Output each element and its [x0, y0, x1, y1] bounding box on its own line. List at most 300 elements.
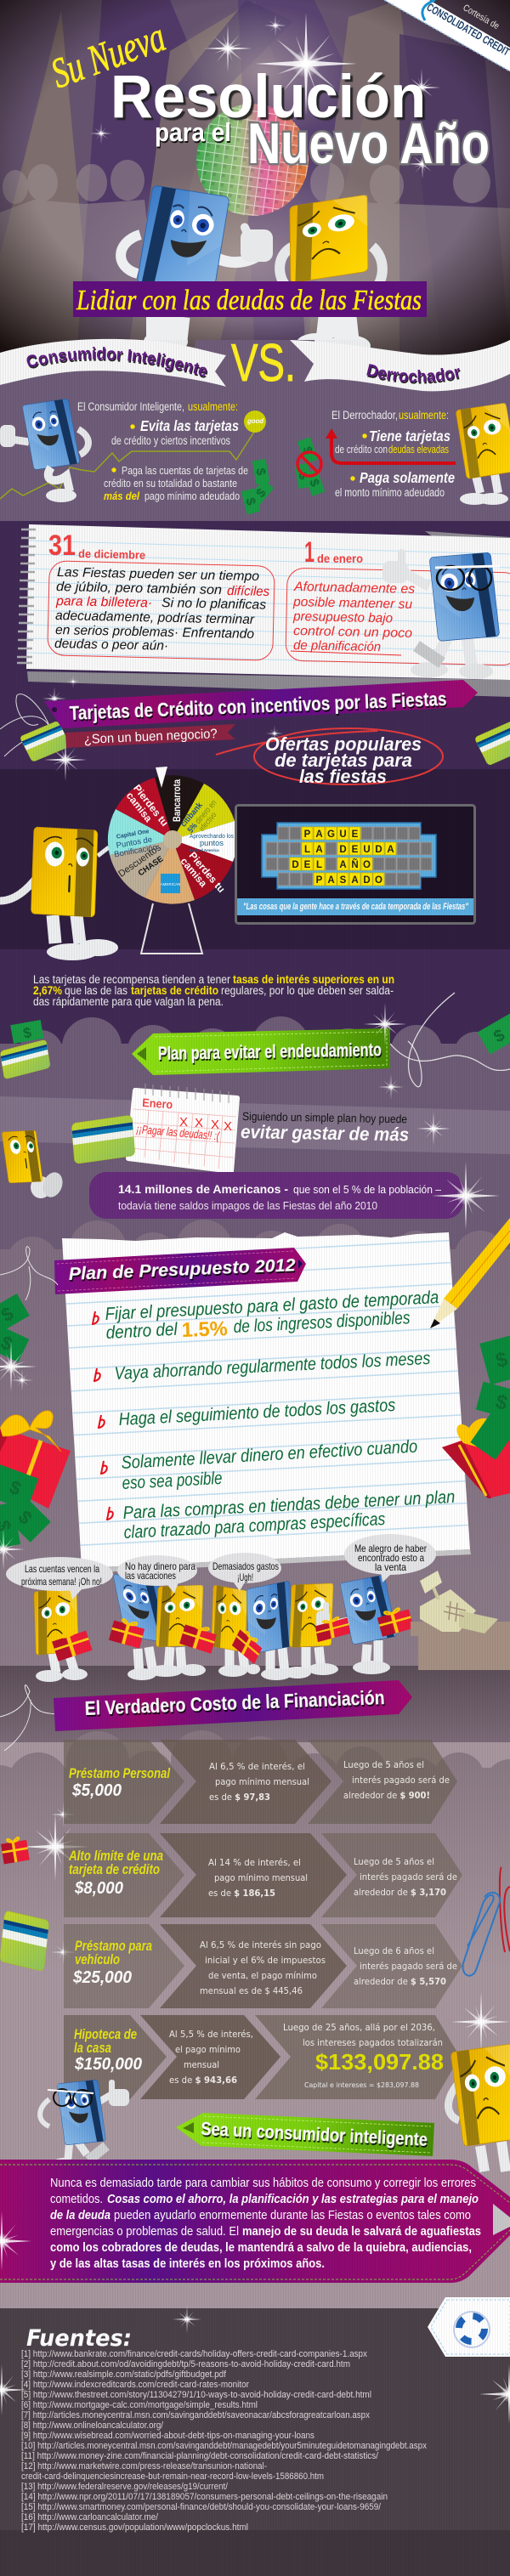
board text: A: [327, 875, 335, 886]
board text: E: [352, 829, 359, 840]
text: simple plan: [241, 1110, 409, 1145]
text: rewards cards interest: que las de las: [65, 984, 128, 997]
row: mortgage: Luego de 25 años, allá por el 2036,: [283, 2022, 435, 2033]
closing text: manejo de su deuda le salvará de aguafiestas: [242, 2225, 481, 2239]
label: Pierdes tu camisa lower: Pierdes tu: [187, 850, 228, 895]
callout: popular offers: [216, 724, 443, 787]
source list: [6] http://www.mortgage-calc.com/mortgage/simple_results.html: [21, 2400, 258, 2410]
icon: money bills right of smart consumer: [241, 459, 275, 515]
bubble: too many expenses: Demasiados gastos: [212, 1560, 279, 1572]
icon: paper clips: [463, 1867, 510, 1976]
chart: rising green line to good credit balloon: [0, 410, 266, 499]
label: Capital One: Bonificación: [113, 843, 158, 859]
label: Descuentos Chase: CHASE: [137, 854, 165, 878]
source list: [9] http://www.wisebread.com/worried-about-debt-tips-on-managing-your-loans: [21, 2431, 314, 2441]
text: spender habits: deudas elevadas: [388, 444, 449, 456]
board cells: [266, 827, 432, 886]
board letter tiles: [290, 827, 396, 886]
sparkles: header: [89, 10, 441, 180]
text: smart consumer habits: de crédito y ciertos incentivos: [111, 434, 230, 447]
floor: dark floor under characters: [0, 1666, 510, 1742]
bubble: glad found sale: la venta: [375, 1561, 406, 1573]
row: vehicle loan: interés pagado será de: [360, 1961, 457, 1972]
board text: A: [387, 845, 394, 855]
decoration: money right: $: [493, 1348, 510, 1373]
row: mortgage: mensual: [184, 2059, 219, 2070]
panel: game show board: [236, 806, 474, 923]
panel: versus comparison: [0, 334, 510, 393]
text: fortunately: control con un poco: [293, 624, 413, 641]
decoration: left side of cost table: [0, 1801, 91, 1971]
title: para el: para el: [155, 117, 231, 147]
list text: Haga el seguimiento de todos los gastos: [118, 1396, 396, 1430]
panel: closing message: [0, 2160, 510, 2283]
row: credit card limit: interés pagado será de: [360, 1871, 457, 1882]
icon: calendar: X: [195, 1116, 203, 1130]
label: American Express square: AMERICAN: [161, 882, 180, 886]
row: credit card limit: Al 14 % de interés, el: [208, 1857, 301, 1868]
text: fortunately: presupuesto bajo: [292, 609, 394, 626]
clouds: second scalloped layer: [0, 1220, 510, 1288]
heading: Derrochador: [366, 375, 462, 382]
logo ribbon: Consolidated Credit: [384, 0, 510, 71]
row: vehicle loan: $25,000: [72, 1968, 132, 1987]
board text: A: [315, 845, 323, 855]
list text: Fijar el presupuesto para el gasto de temporada: [105, 1288, 439, 1324]
bubble: bills due: [6, 1557, 113, 1599]
board text: P: [304, 829, 311, 840]
text: holidays warning: Si no lo planificas: [162, 596, 266, 613]
row: vehicle loan: vehículo: [75, 1951, 120, 1967]
bubble: no vacation money: [117, 1555, 197, 1594]
sparkle: right of cost table: [450, 1990, 510, 2053]
callout: 14.1 millones: todavía tiene saldos impagos de las Fiestas del año 2010: [118, 1200, 377, 1212]
source list: [13] http://www.federalreserve.gov/releases/g19/current/: [21, 2482, 229, 2492]
row: mortgage: $150,000: [74, 2055, 142, 2074]
closing text: de la deuda: [50, 2209, 110, 2222]
badge: life preserver: [428, 2297, 510, 2357]
source list: credit-card-delinquenciesincrease-but-remain-near-record-low-levels-1586860.htm: [21, 2471, 324, 2482]
date: 31 de diciembre: de diciembre: [78, 547, 146, 562]
counter and cash register: [411, 1571, 510, 1670]
decoration: card and money top-left of plan section: $: [22, 1024, 33, 1042]
text: spender habits: de crédito con: [335, 444, 388, 456]
text: holidays warning: Las Fiestas pueden ser un tiempo: [57, 565, 260, 584]
callout: 14.1 millones: [89, 1172, 463, 1219]
text: rewards cards interest: tarjetas de crédito: [131, 984, 218, 997]
source list: [16] http://www.carloancalculator.me/: [21, 2512, 159, 2522]
board text: U: [339, 829, 347, 840]
source list: [15] http://www.smartmoney.com/personal-finance/debt/should-you-consolidate-your-loans-9659/: [21, 2502, 382, 2512]
label: Aprovechando los puntos: [189, 832, 234, 852]
text: smart consumer habits: usualmente:: [188, 400, 238, 413]
list text: Solamente llevar dinero en efectivo cuando: [121, 1437, 418, 1473]
text: holidays warning: para la billetera·: [55, 594, 152, 610]
text: smart consumer habits: Evita las tarjetas: [140, 417, 239, 434]
wheel pointer: [156, 767, 167, 788]
row: mortgage: Hipoteca de: [74, 2026, 137, 2042]
title: Su Nueva: Su Nueva: [45, 13, 171, 97]
heading banner: Plan de Presupuesto 2012: [54, 1248, 306, 1294]
source list: [2] http://credit.about.com/od/avoidingdebt/tp/5-reasons-to-avoid-holiday-credit-card.htm: [21, 2359, 350, 2369]
rope and card left: [0, 694, 71, 762]
heading banner: Sea un consumidor inteligente: [176, 2113, 434, 2156]
legs and feet: [53, 1640, 378, 1674]
text: fortunately: [291, 580, 415, 655]
row: personal loan: $5,000: [71, 1781, 122, 1800]
list text: Vaya ahorrando regularmente todos los meses: [114, 1349, 431, 1384]
character: sitting yellow card: [2, 1130, 65, 1200]
text: smart consumer habits: más del: [104, 490, 139, 502]
callout: 14.1 millones: 14.1 millones de Americanos -: [118, 1183, 288, 1196]
text: smart consumer habits: Paga las cuentas de tarjetas de: [122, 464, 248, 477]
character: yellow 4: [290, 1583, 333, 1647]
text: smart consumer habits: [77, 400, 248, 502]
bubble: glad found sale: [344, 1534, 436, 1582]
ribbon: right white: [290, 340, 510, 391]
icon: money bills right of smart consumer: $: [252, 467, 269, 477]
spotlight beams: [0, 0, 510, 357]
banner: Lidiar con las deudas de las Fiestas: Lidiar con las deudas de las Fiestas: [76, 285, 422, 316]
source list: [4] http://www.indexcreditcards.com/credit-card-rates-monitor: [21, 2380, 249, 2390]
board text: S: [340, 875, 347, 886]
date: 1 de enero: [304, 536, 363, 569]
heading banner: El Verdadero Costo de la Financiación: [54, 1680, 412, 1731]
panel: versus comparison: Derrochador: [366, 364, 461, 384]
panel: torn notepaper budget: [51, 1232, 476, 1573]
closing text: emergencias o problemas de salud. El: [50, 2225, 239, 2239]
icon: calendar: X: [179, 1115, 188, 1129]
icon: calendar: X: [211, 1118, 219, 1132]
date: 31 de diciembre: [48, 529, 146, 562]
text: fortunately: de planificación: [293, 638, 381, 654]
list bullets: [92, 1311, 113, 1520]
row: mortgage: [64, 2015, 460, 2099]
decoration: card and money top-left of plan section: [0, 1020, 50, 1079]
icon: pencil: [430, 1218, 510, 1328]
source list: [12] http://www.marketwire.com/press-release/transunion-national-: [21, 2461, 267, 2471]
list text: 1.5%: [181, 1317, 228, 1342]
source list: [14] http://www.npr.org/2011/07/17/138189057/consumers-personal-debt-ceilings-on-the-riseagain: [21, 2492, 388, 2502]
row: vehicle loan: inicial y el 6% de impuestos: [205, 1955, 326, 1966]
board text: E: [304, 860, 311, 870]
board text: U: [363, 845, 371, 855]
text: holidays warning: de júbilo, pero también son: [56, 580, 222, 597]
row: personal loan: interés pagado será de: [352, 1775, 450, 1786]
bubble: bills due: Las cuentas vencen la: [25, 1563, 99, 1575]
board text: O: [363, 860, 371, 870]
clouds: first scalloped layer: [0, 1016, 510, 1265]
source list: [10] http://articles.moneycentral.msn.com/savinganddebt/managedebt/your5minuteguidetomanagingdebt.aspx: [21, 2441, 427, 2451]
central glow: [170, 4, 357, 140]
notebook spiral: [17, 529, 36, 663]
callout: popular offers: Ofertas populares: [265, 733, 422, 755]
label: Descuentos Chase: Descuentos: [116, 842, 163, 880]
icon: calendar: [128, 1084, 237, 1171]
board text: E: [352, 845, 359, 855]
table: true cost of financing: [64, 1740, 462, 2099]
bubble: no vacation money: No hay dinero para: [125, 1560, 196, 1572]
panel: versus comparison: Consumidor Inteligente: [27, 347, 207, 378]
character: spender yellow card: [456, 403, 510, 505]
row: personal loan: Luego de 5 años el: [343, 1759, 424, 1770]
list text: dentro del: [105, 1320, 178, 1343]
text: spender habits: usualmente:: [399, 409, 449, 422]
clouds: third scalloped layer: [0, 1730, 510, 2312]
rope: cost banner: [0, 1685, 66, 1751]
closing text: Cosas como el ahorro, la planificación y las estrategias para el manejo: [107, 2193, 479, 2206]
character: hero yellow card: [280, 195, 382, 357]
bubble: too many expenses: ¡Ugh!: [237, 1571, 253, 1583]
board text: [292, 829, 394, 886]
date: 1 de enero: 1: [304, 536, 314, 569]
callout: 14.1 millones: que son el 5 % de la población –: [293, 1184, 441, 1196]
bubble: no vacation money: las vacaciones: [125, 1570, 176, 1582]
row: personal loan: [64, 1740, 457, 1824]
board text: D: [339, 845, 347, 855]
closing text: como los cobradores de deudas, le mantendrá a salvo de la quiebra, audiencias,: [50, 2241, 472, 2255]
label: Pierdes tu camisa upper: Pierdes tu: [131, 783, 171, 829]
text: holidays warning: deudas o peor aún·: [54, 637, 168, 654]
list text: claro trazado para compras específicas: [123, 1509, 386, 1543]
footer: sources panel: [0, 2297, 510, 2576]
icon: credit card by calendar: [71, 1115, 135, 1164]
small gifts: [51, 1627, 93, 1662]
bubble: bills due: próxima semana! ¡Oh no!: [21, 1576, 102, 1588]
speech bubbles: [6, 1534, 436, 1599]
row: credit card limit: Alto límite de una: [68, 1848, 163, 1864]
label: American Express square: [161, 874, 180, 893]
label: Capital One: Puntos de: [116, 835, 153, 851]
icon: prohibited money: $: [306, 477, 322, 490]
character: yellow 2: [156, 1585, 203, 1647]
text: simple plan: Siguiendo un simple plan hoy puede: [242, 1110, 407, 1125]
bubble: too many expenses: [208, 1553, 281, 1591]
board text: D: [292, 860, 299, 870]
icon: gift right: [442, 1406, 510, 1498]
sub-banner: ¿Son un buen negocio?: ¿Son un buen negocio?: [83, 727, 218, 747]
icon: prohibited money: [294, 437, 325, 496]
icon: prohibited money: $: [299, 444, 315, 457]
vignette: [0, 0, 510, 357]
text: spender habits: [332, 409, 455, 499]
rope: budget banner: [0, 1247, 58, 1300]
date: 31 de diciembre: 31: [48, 529, 76, 562]
row: personal loan: alrededor de $ 900!: [343, 1790, 430, 1801]
heading banner: Plan para evitar el endeudamiento: [132, 1028, 390, 1075]
sparkles: left of notepaper: [0, 1339, 38, 1394]
text: spender habits: Tiene tarjetas: [369, 427, 450, 444]
board text: A: [351, 875, 359, 886]
icon: disco ball: [196, 102, 310, 217]
heading: Fuentes: Fuentes:: [26, 2325, 132, 2352]
text: holidays warning: adecuadamente, podrías terminar: [55, 609, 255, 627]
crowd silhouettes: [0, 160, 510, 357]
card icon right: [474, 721, 510, 766]
row: vehicle loan: de venta, el pago mínimo: [208, 1970, 317, 1981]
text: fortunately: Afortunadamente es: [293, 580, 415, 597]
source list: [7] http://articles.moneycentral.msn.com/savinganddebt/saveonacar/abcsforagreatcarloan.aspx: [21, 2410, 370, 2420]
closing text: pueden ayudarlo enormemente durante las Fiestas o eventos tales como: [114, 2209, 471, 2222]
text: rewards cards interest: regulares, por lo que deben ser salda-: [221, 984, 394, 997]
heading banner: El Verdadero Costo de la Financiación: El Verdadero Costo de la Financiación: [84, 1686, 385, 1719]
callout outline: right: [286, 568, 510, 665]
row: mortgage: $133,097.88: [315, 2049, 444, 2075]
row: credit card limit: pago mínimo mensual: [214, 1872, 308, 1883]
character: yellow 3: [212, 1585, 247, 1652]
icon: gift left: [0, 1411, 71, 1509]
rope: right of plan banner: [390, 993, 510, 1087]
decoration: money right: [476, 1333, 510, 1462]
character: blue 1: [113, 1574, 170, 1644]
text: rewards cards interest: 2,67%: [33, 984, 62, 997]
label: Capital One: Capital One: [116, 829, 150, 841]
decoration: money top-right of plan section: [478, 1014, 510, 1055]
ribbon: left white: [0, 339, 226, 387]
character: hero blue card: [121, 185, 273, 354]
icon: prohibited money: $: [295, 472, 311, 481]
text: rewards cards interest: Las tarjetas de recompensa tienden a tener: [33, 973, 230, 986]
label: Pierdes tu camisa upper: camisa: [124, 790, 155, 824]
source list: [17] http://www.census.gov/population/www/popclockus.html: [21, 2522, 248, 2533]
icon: calendar: X: [224, 1119, 232, 1134]
title block: [45, 13, 490, 176]
text: spender habits: El Derrochador,: [332, 409, 398, 422]
decoration: money under gift left: $: [14, 1506, 37, 1529]
courtesy label: Cortesía de: [461, 3, 501, 31]
character: yellow 1: [34, 1588, 78, 1655]
character: smart consumer blue card: [0, 399, 88, 502]
decoration: money right: $: [493, 1390, 510, 1415]
source list: [3] http://www.realsimple.com/static/pdfs/giftbudget.pdf: [21, 2369, 227, 2380]
board text: O: [375, 875, 382, 886]
board text: L: [316, 860, 322, 870]
text: fortunately: posible mantener su: [292, 595, 413, 612]
label: Capital One: [110, 828, 158, 859]
sparkle: closing panel left: [0, 2210, 33, 2273]
wheel stand: [141, 903, 202, 954]
date: 1 de enero: de enero: [317, 552, 363, 565]
row: personal loan: Préstamo Personal: [69, 1765, 171, 1781]
row: credit card limit: alrededor de $ 3,170: [354, 1887, 446, 1898]
row: credit card limit: [64, 1833, 462, 1917]
bubble: glad found sale: encontrado esto a: [358, 1552, 424, 1564]
panel: notebook: [17, 524, 510, 697]
row: mortgage: la casa: [74, 2040, 111, 2056]
row: credit card limit: tarjeta de crédito: [69, 1861, 160, 1877]
row: mortgage: es de $ 943,66: [169, 2075, 237, 2086]
board text: A: [339, 860, 347, 870]
source list: [21, 2349, 427, 2533]
row: vehicle loan: Luego de 6 años el: [354, 1945, 434, 1956]
chart: rising green line to good credit balloon: good: [246, 416, 264, 425]
decoration: money top-right of plan section: $: [490, 1026, 508, 1047]
text: smart consumer habits: El Consumidor Inteligente,: [77, 400, 184, 413]
label: citibank: efectivo: [197, 811, 218, 834]
thumbs-up hand: [316, 1602, 348, 1634]
closing text: [50, 2177, 481, 2271]
counter: [411, 1622, 510, 1670]
character: blue 2: [246, 1581, 292, 1655]
text: holidays warning: [54, 565, 270, 654]
sparkles: plan section: [363, 1002, 451, 1146]
row: vehicle loan: Préstamo para: [75, 1938, 152, 1954]
sparkle: left of speech bubbles: [0, 1527, 26, 1571]
list text: eso sea posible: [122, 1469, 223, 1493]
heading banner: Plan de Presupuesto 2012: Plan de Presupuesto 2012: [68, 1255, 296, 1284]
source list: [5] http://www.thestreet.com/story/11304279/1/10-ways-to-avoid-holiday-credit-card-debt.html: [21, 2390, 371, 2400]
row: vehicle loan: [64, 1924, 462, 2008]
text: spender habits: el monto mínimo adeudado: [335, 486, 445, 499]
header: party scene: [0, 0, 510, 365]
decoration: money left stack: [0, 1294, 30, 1362]
decoration: money under gift left: [0, 1464, 51, 1549]
board text: P: [316, 875, 323, 886]
row: personal loan: es de $ 97,83: [209, 1792, 270, 1803]
row: credit card limit: es de $ 186,15: [208, 1888, 275, 1899]
character: surprised yellow card: [0, 827, 118, 960]
icon: money bills right of smart consumer: $: [242, 496, 258, 507]
text: smart consumer habits: crédito en su totalidad o bastante: [104, 477, 237, 490]
text: holidays warning: en serios problemas· Enfrentando: [55, 623, 255, 642]
board text: G: [327, 829, 335, 840]
label: Aprovechando los puntos: Bank of America: [189, 848, 219, 852]
closing text: cometidos.: [50, 2193, 103, 2206]
row: mortgage: el pago mínimo: [175, 2044, 241, 2055]
text: holidays warning: difíciles: [227, 584, 270, 599]
callout: popular offers: de tarjetas para: [275, 750, 412, 771]
label: citibank: citibank: [179, 801, 205, 829]
cash register: [420, 1589, 476, 1632]
bubble: glad found sale: Me alegro de haber: [354, 1543, 427, 1554]
row: credit card limit: Luego de 5 años el: [354, 1856, 434, 1867]
list text: de los ingresos disponibles: [233, 1308, 411, 1337]
list text: Para las compras en tiendas debe tener un plan: [122, 1487, 456, 1523]
text: smart consumer habits: pago mínimo adeudado: [144, 490, 240, 502]
label: Pierdes tu camisa lower: camisa: [178, 855, 210, 890]
character: blue 3: [340, 1575, 397, 1645]
text: rewards cards interest: [33, 973, 394, 1008]
board frame: [262, 823, 436, 889]
board text: L: [304, 845, 310, 855]
source list: [8] http://www.onlineloancalculator.org/: [21, 2420, 164, 2431]
icon: money bills right of smart consumer: $: [253, 485, 269, 501]
board text: D: [375, 845, 382, 855]
row: vehicle loan: alrededor de $ 5,570: [354, 1976, 446, 1987]
band: diagonal light strip behind plan heading: [0, 1096, 510, 1154]
sparkles: credit section: [42, 675, 88, 782]
board text: Ñ: [351, 859, 359, 870]
logo swirl: [422, 0, 435, 20]
heading: VS.: VS.: [231, 334, 296, 393]
decoration: money under gift left: $: [7, 1476, 24, 1499]
closing text: y de las altas tasas de interés en los próximos años.: [50, 2257, 325, 2271]
sparkle: callout: [430, 1160, 502, 1231]
row: credit card limit: $8,000: [74, 1879, 123, 1898]
label: Aprovechando los puntos: Aprovechando los: [190, 832, 234, 840]
heading banner: Plan para evitar el endeudamiento: Plan para evitar el endeudamiento: [158, 1039, 382, 1064]
wall: middle section background: [0, 1271, 510, 1670]
character: blue card with glasses lower: [40, 2080, 129, 2168]
characters: shopping line: [34, 1574, 414, 1682]
label: Aprovechando los puntos: puntos: [200, 839, 224, 847]
callout: popular offers: las fiestas: [299, 766, 387, 787]
row: mortgage: Al 5,5 % de interés,: [169, 2029, 253, 2040]
callout outline: left: [48, 561, 275, 660]
row: mortgage: Capital e intereses = $283,097.88: [304, 2081, 419, 2089]
icon: calendar: ¡¡Pagar las deudas!! :(: [136, 1122, 221, 1143]
label: citibank: 5% dinero en: [186, 798, 219, 835]
